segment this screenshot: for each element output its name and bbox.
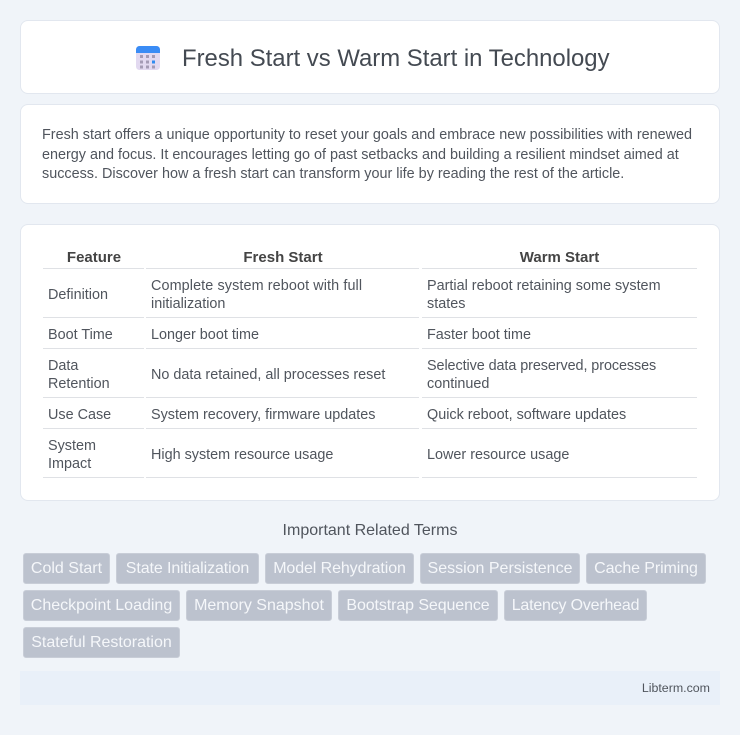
- row: Boot Time: Boot Time: [48, 327, 113, 343]
- row: System Impact: System: [48, 438, 96, 454]
- table: Quick reboot, software updates: [427, 407, 626, 423]
- tag: [338, 590, 498, 621]
- tag: [504, 590, 647, 621]
- tag: State Initialization: [126, 560, 249, 577]
- table: Impact: [48, 456, 91, 472]
- table: No data retained, all processes reset: [151, 367, 385, 383]
- tag: [23, 590, 180, 621]
- table: Lower resource usage: [427, 447, 569, 463]
- intro paragraph: Fresh start offers a unique opportunity to reset your goals and embrace new possibilities with renewed: [42, 127, 692, 143]
- header: Warm Start: Warm Start: [520, 249, 599, 266]
- header: Fresh Start: Fresh Start: [243, 249, 323, 266]
- tag: [186, 590, 332, 621]
- related terms heading: Important Related Terms: [283, 522, 457, 539]
- tag: Latency Overhead: [512, 597, 639, 614]
- table: continued: [427, 376, 489, 392]
- intro text panel: [20, 104, 720, 204]
- tag: [23, 553, 110, 584]
- table: states: [427, 296, 465, 312]
- related terms tags: [23, 553, 706, 658]
- table: Selective data preserved, processes: [427, 358, 656, 374]
- tag: [586, 553, 706, 584]
- tag: Session Persistence: [428, 560, 572, 577]
- title: Fresh Start vs Warm Start in Technology: [182, 45, 610, 72]
- comparison table panel: [20, 224, 720, 501]
- table: initialization: [151, 296, 225, 312]
- tag: Memory Snapshot: [194, 597, 324, 614]
- tag: Checkpoint Loading: [31, 597, 172, 614]
- table: Longer boot time: [151, 327, 259, 343]
- title card: [20, 20, 720, 94]
- tag: [116, 553, 259, 584]
- table: System recovery, firmware updates: [151, 407, 375, 423]
- footer bar: [20, 671, 720, 705]
- table: Complete system reboot with full: [151, 278, 362, 294]
- tag: [420, 553, 580, 584]
- row: Data Retention: Data: [48, 358, 78, 374]
- table: Retention: [48, 376, 110, 392]
- tag: Bootstrap Sequence: [346, 597, 490, 614]
- tag: Model Rehydration: [273, 560, 406, 577]
- row: Definition: Definition: [48, 287, 108, 303]
- intro paragraph: energy and focus. It encourages letting go of past setbacks and building a resilient mindset aimed at: [42, 146, 679, 162]
- footer credit: Libterm.com: [642, 681, 710, 695]
- table: High system resource usage: [151, 447, 333, 463]
- tag: Cold Start: [31, 560, 102, 577]
- tag: Cache Priming: [594, 560, 698, 577]
- tag: Stateful Restoration: [31, 634, 172, 651]
- tag: [23, 627, 180, 658]
- tag: [265, 553, 414, 584]
- header: Feature: Feature: [67, 249, 121, 266]
- table: Partial reboot retaining some system: [427, 278, 661, 294]
- intro paragraph: success. Discover how a fresh start can transform your life by reading the rest of the article.: [42, 166, 624, 182]
- row: Use Case: Use Case: [48, 407, 111, 423]
- intro paragraph: [42, 127, 692, 182]
- table: Faster boot time: [427, 327, 531, 343]
- icon: calendar: [136, 46, 160, 70]
